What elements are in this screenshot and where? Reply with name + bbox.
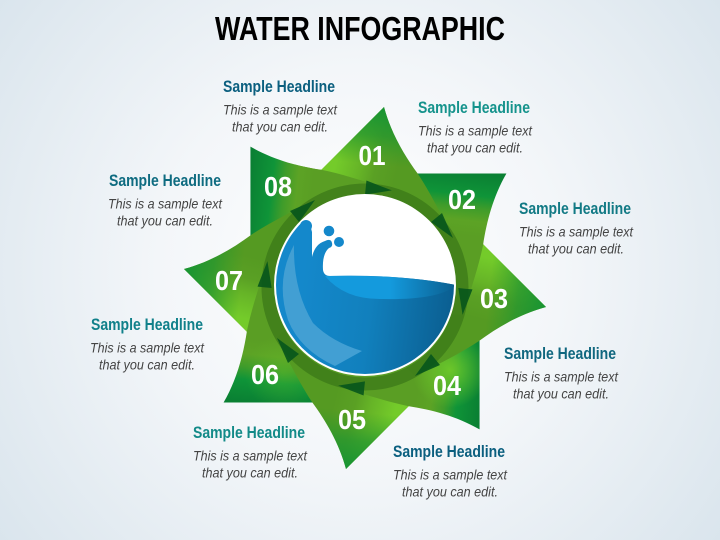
text block 05: that you can edit. <box>402 484 498 500</box>
number 06: 06 <box>251 359 279 390</box>
text block 03: Sample Headline <box>519 200 631 218</box>
text block 05: Sample Headline <box>393 443 505 461</box>
text block 02: that you can edit. <box>427 140 523 156</box>
text block 04: Sample Headline <box>504 345 616 363</box>
text block 08: that you can edit. <box>117 212 213 228</box>
text block 03: that you can edit. <box>528 240 624 256</box>
text block 06: This is a sample text <box>193 448 308 464</box>
text block 08: This is a sample text <box>108 196 223 212</box>
text block 01: This is a sample text <box>223 102 338 118</box>
number 04: 04 <box>433 370 461 401</box>
text block 01: that you can edit. <box>232 118 328 134</box>
text block 03 <box>519 200 634 256</box>
text block 02: Sample Headline <box>418 99 530 117</box>
text block 02: This is a sample text <box>418 122 533 138</box>
text block 06 <box>193 424 308 480</box>
text block 01 <box>223 78 338 134</box>
text block 07: This is a sample text <box>90 340 205 356</box>
text block 06: that you can edit. <box>202 464 298 480</box>
number 08: 08 <box>264 171 292 202</box>
text block 04: This is a sample text <box>504 368 619 384</box>
text block 05: This is a sample text <box>393 466 508 482</box>
text block 03: This is a sample text <box>519 224 634 240</box>
text block 04 <box>504 345 619 402</box>
text block 07: that you can edit. <box>99 356 195 372</box>
text block 01: Sample Headline <box>223 78 335 96</box>
text block 02 <box>418 99 533 156</box>
petal flower <box>175 98 555 478</box>
text block 06: Sample Headline <box>193 424 305 442</box>
number 01: 01 <box>358 140 386 171</box>
text block 05 <box>393 443 508 500</box>
water circle icon <box>270 194 456 380</box>
number 05: 05 <box>338 404 366 435</box>
title: WATER INFOGRAPHIC <box>215 10 505 47</box>
text block 07 <box>90 316 205 372</box>
number 02: 02 <box>448 184 476 215</box>
text block 04: that you can edit. <box>513 386 609 402</box>
text block 07: Sample Headline <box>91 316 203 334</box>
number 03: 03 <box>480 283 508 314</box>
text block 08 <box>108 172 223 228</box>
number 07: 07 <box>215 265 243 296</box>
text block 08: Sample Headline <box>109 172 221 190</box>
